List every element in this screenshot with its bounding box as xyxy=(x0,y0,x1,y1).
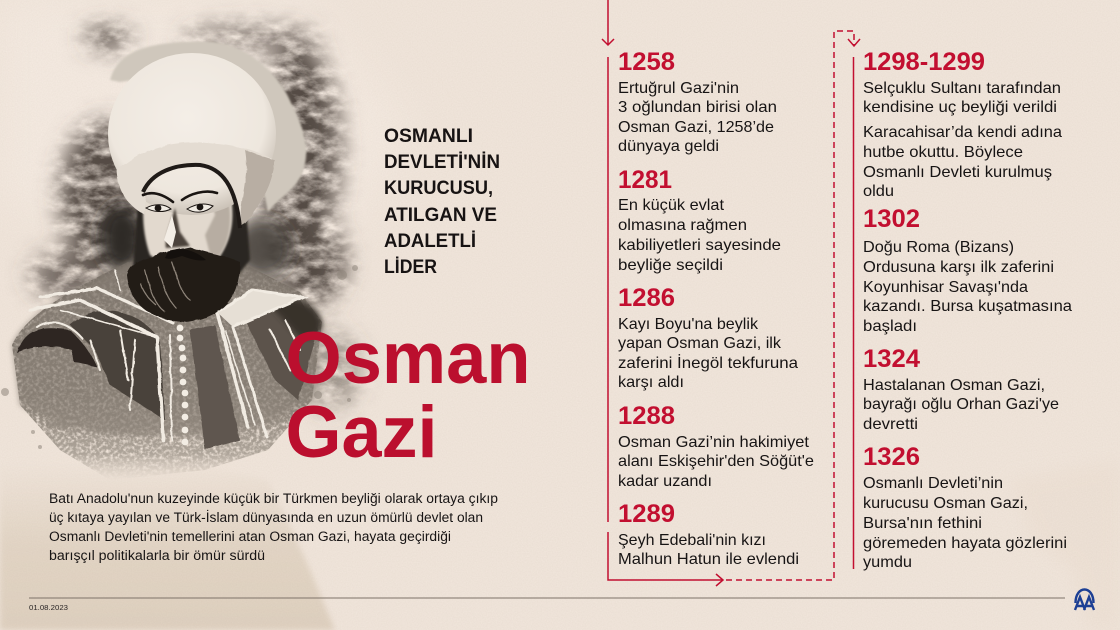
entry 1286: 1286 xyxy=(618,284,675,312)
entry 1258: 1258 xyxy=(618,48,675,76)
entry 1286: karşı aldı xyxy=(618,374,684,391)
dashed connector xyxy=(726,31,854,580)
beard and moustache xyxy=(127,247,240,322)
entry 1298-1299: hutbe okuttu. Böylece xyxy=(863,144,1023,161)
heading: ATILGAN VE xyxy=(384,205,497,226)
entry 1288 xyxy=(618,402,814,490)
intro paragraph: Batı Anadolu'nun kuzeyinde küçük bir Türkmen beyliği olarak ortaya çıkıp xyxy=(49,491,498,506)
entry 1298-1299: kendisine uç beyliği verildi xyxy=(863,99,1057,116)
entry 1281: beyliğe seçildi xyxy=(618,257,723,274)
entry 1258: Ertuğrul Gazi'nin xyxy=(618,80,739,97)
entry 1326: yumdu xyxy=(863,554,912,571)
intro paragraph xyxy=(49,491,498,563)
entry 1324: bayrağı oğlu Orhan Gazi'ye xyxy=(863,396,1059,413)
entry 1281: 1281 xyxy=(618,166,672,194)
entry 1298-1299 xyxy=(863,48,1062,200)
dark shadow beside face xyxy=(100,204,292,278)
heading: KURUCUSU, xyxy=(384,178,493,199)
timeline arrows xyxy=(602,0,860,586)
turban xyxy=(108,53,276,215)
entry 1288: 1288 xyxy=(618,402,675,430)
smoke shading xyxy=(30,26,360,410)
left timeline line xyxy=(608,57,723,586)
entry 1326 xyxy=(863,443,1067,571)
heading xyxy=(384,126,500,278)
entry 1258: dünyaya geldi xyxy=(618,138,719,155)
entry 1326: Bursa'nın fethini xyxy=(863,515,982,532)
robe buttons xyxy=(177,325,188,445)
turban sash xyxy=(110,42,306,212)
entry 1281: En küçük evlat xyxy=(618,197,725,214)
entry 1289: Malhun Hatun ile evlendi xyxy=(618,551,799,568)
arrow: second column xyxy=(848,39,860,46)
heading: ADALETLİ xyxy=(384,231,476,252)
entry 1302: 1302 xyxy=(863,205,920,233)
entry 1302: Doğu Roma (Bizans) xyxy=(863,239,1014,256)
entry 1298-1299: 1298-1299 xyxy=(863,48,985,76)
entry 1302: Koyunhisar Savaşı'nda xyxy=(863,279,1028,296)
entry 1302: kazandı. Bursa kuşatmasına xyxy=(863,298,1072,315)
entry 1289: 1289 xyxy=(618,500,675,528)
heading: OSMANLI xyxy=(384,126,473,147)
entry 1326: Osmanlı Devleti’nin xyxy=(863,475,1003,492)
heading: DEVLETİ'NİN xyxy=(384,152,500,173)
entry 1302: Ordusuna karşı ilk zaferini xyxy=(863,259,1054,276)
arrow: top entry xyxy=(602,0,614,45)
intro paragraph: üç kıtaya yayılan ve Türk-İslam dünyasında en uzun ömürlü devlet olan xyxy=(49,510,483,525)
entry 1324: 1324 xyxy=(863,345,920,373)
entry 1281: olmasına rağmen xyxy=(618,217,747,234)
ink splatter xyxy=(1,265,358,449)
right timeline line xyxy=(852,57,854,569)
entry 1281 xyxy=(618,166,781,274)
timeline column 2 xyxy=(863,48,1072,571)
title: Osman Gazi: Gazi xyxy=(286,392,438,473)
title: Osman Gazi: Osman xyxy=(286,318,530,399)
portrait of Osman Gazi xyxy=(1,26,360,480)
entry 1302 xyxy=(863,205,1072,335)
entry 1288: alanı Eskişehir'den Söğüt'e xyxy=(618,453,814,470)
entry 1288: Osman Gazi’nin hakimiyet xyxy=(618,434,810,451)
entry 1289 xyxy=(618,500,799,568)
entry 1258: Osman Gazi, 1258’de xyxy=(618,119,774,136)
heading: LİDER xyxy=(384,257,437,278)
footer rule and date: 01.08.2023 xyxy=(29,603,68,612)
entry 1326: kurucusu Osman Gazi, xyxy=(863,495,1028,512)
entry 1258: 3 oğlundan birisi olan xyxy=(618,99,777,116)
entry 1324: devretti xyxy=(863,416,918,433)
entry 1298-1299: oldu xyxy=(863,183,894,200)
title: Osman Gazi xyxy=(286,318,530,473)
entry 1302: başladı xyxy=(863,318,917,335)
entry 1289: Şeyh Edebali'nin kızı xyxy=(618,532,766,549)
facial features xyxy=(143,192,217,212)
entry 1324 xyxy=(863,345,1059,433)
entry 1324: Hastalanan Osman Gazi, xyxy=(863,377,1045,394)
entry 1281: kabiliyetleri sayesinde xyxy=(618,237,781,254)
entry 1326: göremeden hayata gözlerini xyxy=(863,535,1067,552)
robe xyxy=(12,262,322,480)
entry 1298-1299: Karacahisar’da kendi adına xyxy=(863,124,1062,141)
entry 1286: Kayı Boyu'na beylik xyxy=(618,316,759,333)
intro paragraph: barışçıl politikalarla bir ömür sürdü xyxy=(49,548,265,563)
neck and hair shadow xyxy=(133,165,250,295)
icon: AA logo xyxy=(1075,590,1094,610)
intro paragraph: Osmanlı Devleti'nin temellerini atan Osman Gazi, hayata geçirdiği xyxy=(49,529,451,544)
robe trim xyxy=(30,270,303,440)
timeline column 1 xyxy=(618,48,814,568)
entry 1288: kadar uzandı xyxy=(618,473,712,490)
entry 1298-1299: Selçuklu Sultanı tarafından xyxy=(863,80,1061,97)
entry 1258 xyxy=(618,48,777,155)
entry 1326: 1326 xyxy=(863,443,920,471)
entry 1286: yapan Osman Gazi, ilk xyxy=(618,335,782,352)
entry 1286 xyxy=(618,284,798,391)
entry 1298-1299: Osmanlı Devleti kurulmuş xyxy=(863,164,1052,181)
entry 1286: zaferini İnegöl tekfuruna xyxy=(618,353,798,372)
face xyxy=(143,167,232,268)
